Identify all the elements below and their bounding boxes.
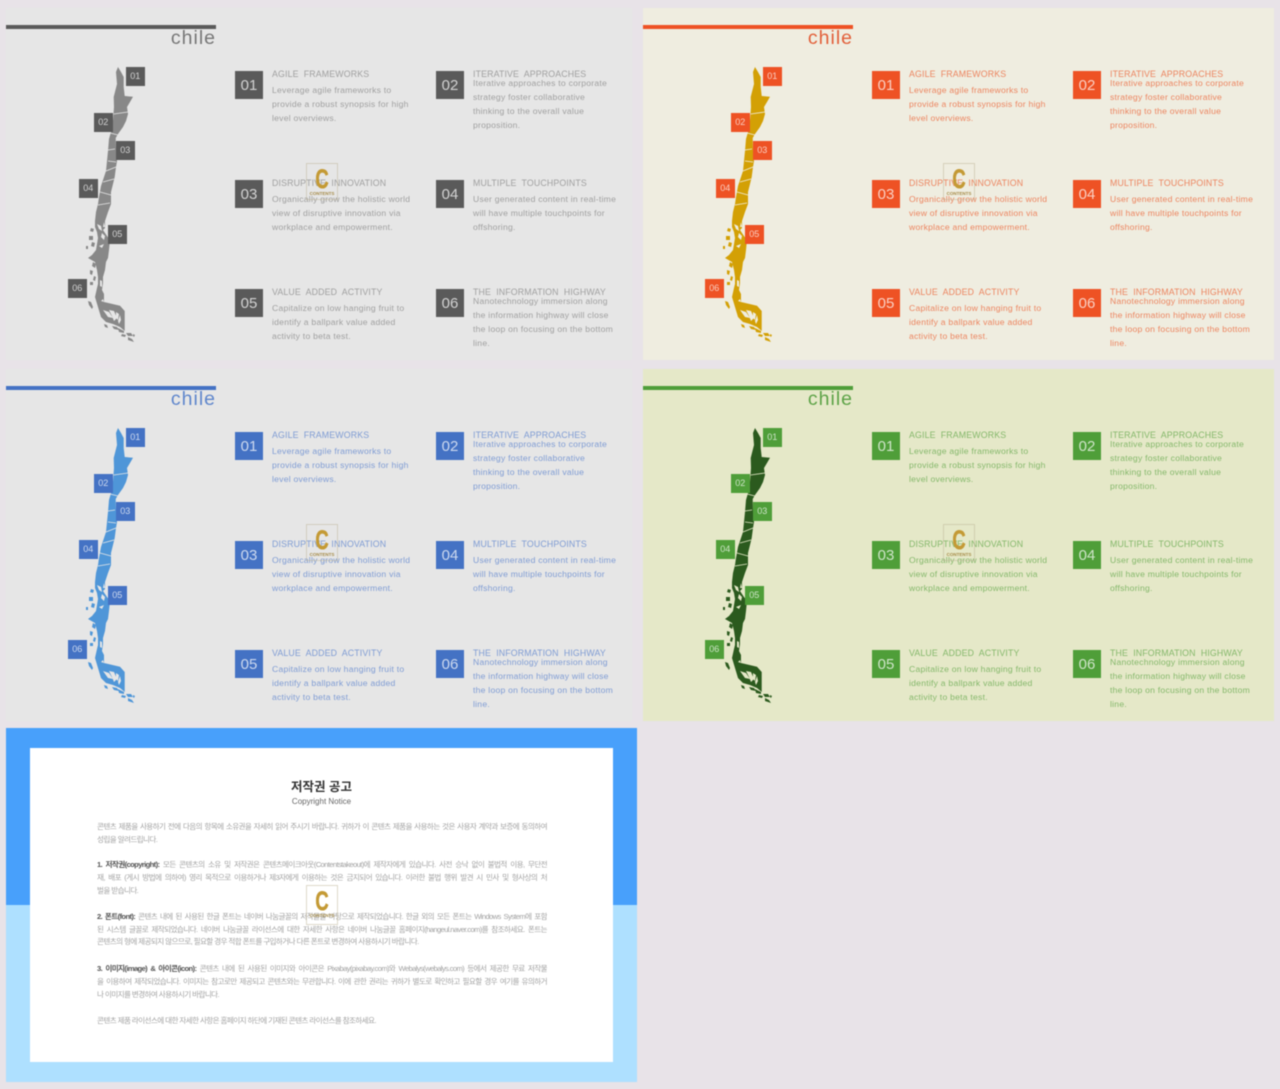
item 06: the information highway will close (1110, 310, 1246, 320)
item 02: thinking to the overall value (1110, 106, 1221, 116)
item 04: will have multiple touchpoints for (473, 208, 605, 218)
item 05 (234, 286, 404, 341)
heading: chile: chile (171, 388, 216, 410)
item 01: level overviews. (272, 474, 336, 484)
watermark logo (943, 524, 975, 561)
item 02: ITERATIVE APPROACHES (473, 68, 586, 78)
item 01 (234, 430, 409, 484)
item 02: proposition. (473, 120, 520, 130)
item 05: identify a ballpark value added (909, 678, 1033, 688)
item 06: THE INFORMATION HIGHWAY (1110, 648, 1243, 658)
item 01 (871, 68, 1046, 122)
map marker 05: 05 (112, 229, 122, 239)
map marker 05: 05 (112, 590, 122, 600)
item 02: 02 (442, 77, 458, 94)
panel: red and gold chile slide (643, 8, 1274, 360)
item 02: Iterative approaches to corporate (473, 78, 607, 88)
item 01 (871, 430, 1046, 484)
item 06: the loop on focusing on the bottom (1110, 324, 1250, 334)
item 03: Organically grow the holistic world (272, 194, 410, 204)
map marker 06 (68, 279, 86, 298)
map marker 03 (116, 141, 134, 160)
item 06: Nanotechnology immersion along (473, 657, 608, 667)
item 05: Capitalize on low hanging fruit to (909, 664, 1041, 674)
item 01: Leverage agile frameworks to (909, 84, 1028, 94)
item 04: User generated content in real-time (473, 554, 616, 564)
item 01: 01 (241, 77, 257, 94)
paragraph 3: image and icon (96, 964, 548, 999)
watermark logo: CONTENTS (947, 191, 971, 196)
item 06: Nanotechnology immersion along (473, 296, 608, 306)
item 01: 01 (878, 438, 894, 455)
item 03: workplace and empowerment. (272, 582, 393, 592)
watermark logo (306, 524, 338, 561)
map of Chile: grey (86, 67, 136, 342)
item 04 (1072, 538, 1253, 593)
item 03: 03 (241, 547, 257, 564)
heading: chile: chile (808, 388, 853, 410)
paragraph 2: font (96, 912, 548, 946)
item 02 (1072, 430, 1244, 491)
item 02: strategy foster collaborative (1110, 453, 1222, 463)
item 03: 03 (241, 186, 257, 203)
item 02: 02 (1079, 77, 1095, 94)
map marker 02: 02 (98, 478, 108, 488)
item 04: 04 (442, 547, 458, 564)
item 01: Leverage agile frameworks to (272, 446, 391, 456)
item 06: line. (473, 699, 490, 709)
paragraph 3: image and icon: 을 이용하여 제작되었습니다. 이미지는 참고로만 제공되고 콘텐츠와는 무관합니다. 이에 관한 권리는 귀하가 별도로 확인하고 필요할 경우 여기를 유의하거 (97, 977, 547, 986)
item 04: MULTIPLE TOUCHPOINTS (1110, 178, 1224, 188)
map marker 03 (753, 141, 772, 160)
map marker 01 (126, 428, 144, 446)
panel: green chile slide (643, 369, 1274, 721)
item 06: line. (473, 338, 490, 348)
item 03 (234, 538, 410, 593)
item 03: view of disruptive innovation via (909, 208, 1038, 218)
map marker 02: 02 (735, 478, 745, 488)
item 01: level overviews. (909, 474, 974, 484)
paragraph 3: image and icon: 3. 이미지(image) & 아이콘(icon): 콘텐츠 내에 된 사용된 이미지와 아이콘은 Pixabay(pixabay.com)와 Webalys(webalys.com) 등에서 제공한 무료 저작물 (97, 964, 547, 973)
item 04: offshoring. (473, 222, 516, 232)
map marker 03: 03 (120, 506, 130, 516)
item 06: 06 (442, 656, 458, 673)
item 03: Organically grow the holistic world (909, 554, 1047, 564)
item 03 (234, 178, 410, 232)
item 06: the information highway will close (473, 671, 609, 681)
item 05: activity to beta test. (909, 692, 988, 702)
item 02: thinking to the overall value (473, 467, 584, 477)
map marker 02 (731, 113, 750, 132)
map marker 06: 06 (709, 283, 719, 293)
item 02: thinking to the overall value (1110, 467, 1221, 477)
item 03: Organically grow the holistic world (272, 554, 410, 564)
notice card (30, 748, 613, 1062)
item 03: DISRUPTIVE INNOVATION (909, 538, 1023, 548)
item 02: proposition. (1110, 120, 1157, 130)
item 05: 05 (241, 656, 257, 673)
paragraph 1: copyright: 벌을 받습니다. (97, 886, 138, 895)
item 04 (435, 538, 616, 593)
item 04: User generated content in real-time (473, 194, 616, 204)
item 02 (1072, 68, 1244, 130)
item 06: 06 (442, 295, 458, 312)
map marker 01: 01 (767, 71, 777, 81)
map marker 03 (753, 502, 772, 520)
map marker 03: 03 (757, 506, 767, 516)
item 02: ITERATIVE APPROACHES (473, 430, 586, 440)
heading bar: grey (6, 25, 216, 28)
watermark logo (943, 163, 975, 200)
map marker 05: 05 (749, 229, 759, 239)
map marker 02 (94, 474, 112, 492)
heading bar: blue (6, 386, 216, 390)
map marker 06 (68, 640, 86, 658)
map marker 02 (94, 113, 112, 132)
item 05: activity to beta test. (272, 692, 351, 702)
item 05 (234, 648, 404, 702)
item 04: will have multiple touchpoints for (473, 568, 605, 578)
item 03: DISRUPTIVE INNOVATION (272, 538, 386, 548)
item 05: Capitalize on low hanging fruit to (272, 664, 404, 674)
item 06: the loop on focusing on the bottom (473, 324, 613, 334)
item 04: 04 (442, 186, 458, 203)
map marker 06 (705, 640, 724, 658)
map marker 01: 01 (130, 71, 140, 81)
item 02: strategy foster collaborative (1110, 92, 1222, 102)
item 02 (435, 430, 607, 491)
watermark logo: C (315, 886, 329, 916)
map marker 01: 01 (767, 432, 777, 442)
item 01: provide a robust synopsis for high (272, 460, 409, 470)
item 04: MULTIPLE TOUCHPOINTS (473, 178, 587, 188)
item 04: 04 (1079, 186, 1095, 203)
item 04: User generated content in real-time (1110, 554, 1253, 564)
item 01 (234, 68, 409, 122)
item 06: the loop on focusing on the bottom (473, 685, 613, 695)
map marker 06: 06 (72, 283, 82, 293)
map marker 05 (108, 586, 126, 604)
item 04: will have multiple touchpoints for (1110, 208, 1242, 218)
item 01: provide a robust synopsis for high (272, 98, 409, 108)
map marker 04 (79, 540, 98, 558)
item 05: identify a ballpark value added (272, 316, 396, 326)
item 04: offshoring. (1110, 222, 1153, 232)
item 05: identify a ballpark value added (909, 316, 1033, 326)
panel: blue chile slide (6, 369, 632, 721)
watermark logo: C (952, 525, 966, 555)
map marker 04: 04 (83, 544, 93, 554)
item 06: the loop on focusing on the bottom (1110, 685, 1250, 695)
map marker 01: 01 (130, 432, 140, 442)
map marker 04 (79, 179, 98, 198)
map marker 04: 04 (83, 183, 93, 193)
item 01: level overviews. (909, 112, 974, 122)
paragraph 1: copyright: 1. 저작권(copyright): 모든 콘텐츠의 소유 및 저작권은 콘텐츠메이크아웃(Contentstakeout)에 제작자에게 있습니다. 사전 승낙 없이 불법적 이용, 무단전 (97, 860, 547, 869)
item 04 (1072, 178, 1253, 232)
watermark logo: C (315, 525, 329, 555)
item 06: line. (1110, 699, 1127, 709)
item 02: Iterative approaches to corporate (1110, 78, 1244, 88)
item 01: level overviews. (272, 112, 336, 122)
item 04: will have multiple touchpoints for (1110, 568, 1242, 578)
item 02: thinking to the overall value (473, 106, 584, 116)
watermark logo: CONTENTS (947, 552, 971, 557)
map of Chile: dark green (722, 428, 772, 704)
item 03: 03 (878, 547, 894, 564)
paragraph 2: font: 된 시스템 글꼴로 제작되었습니다. 네이버 나눔글꼴 라이선스에 대한 자세한 사항은 네이버 나눔글꼴 홈페이지(hangeul.naver.com)를 참조하세요. 폰트는 (97, 925, 547, 934)
item 03: view of disruptive innovation via (909, 568, 1038, 578)
item 06 (1072, 286, 1250, 348)
item 06 (435, 648, 613, 709)
item 01: provide a robust synopsis for high (909, 98, 1046, 108)
heading bar: red (643, 25, 853, 28)
map marker 03: 03 (757, 145, 767, 155)
item 03: view of disruptive innovation via (272, 208, 401, 218)
item 02: ITERATIVE APPROACHES (1110, 430, 1223, 440)
item 01: 01 (241, 438, 257, 455)
item 06: THE INFORMATION HIGHWAY (1110, 286, 1243, 296)
item 04: User generated content in real-time (1110, 194, 1253, 204)
item 04: offshoring. (473, 582, 516, 592)
map marker 04 (716, 540, 734, 558)
item 02: strategy foster collaborative (473, 453, 585, 463)
watermark logo (306, 885, 338, 925)
item 02 (435, 68, 607, 130)
item 03: workplace and empowerment. (272, 222, 393, 232)
item 01: Leverage agile frameworks to (272, 84, 391, 94)
item 01: 01 (878, 77, 894, 94)
paragraph 3: image and icon: 나 이미지를 변경하여 사용하시기 바랍니다. (97, 990, 219, 999)
map marker 04: 04 (720, 183, 730, 193)
item 02: ITERATIVE APPROACHES (1110, 68, 1223, 78)
item 02: proposition. (473, 481, 520, 491)
item 01: Leverage agile frameworks to (909, 446, 1028, 456)
map marker 05 (745, 225, 764, 244)
item 05: 05 (878, 295, 894, 312)
item 02: Iterative approaches to corporate (473, 439, 607, 449)
item 03: workplace and empowerment. (909, 222, 1030, 232)
item 02: 02 (442, 438, 458, 455)
item 06: 06 (1079, 295, 1095, 312)
item 06: line. (1110, 338, 1127, 348)
watermark logo: C (952, 164, 966, 194)
item 01: AGILE FRAMEWORKS (272, 68, 369, 78)
item 02: strategy foster collaborative (473, 92, 585, 102)
item 05: VALUE ADDED ACTIVITY (272, 648, 382, 658)
item 03: 03 (878, 186, 894, 203)
map marker 03: 03 (120, 145, 130, 155)
item 02: Iterative approaches to corporate (1110, 439, 1244, 449)
panel: grey chile slide (6, 8, 632, 360)
map marker 02 (731, 474, 750, 492)
item 05: VALUE ADDED ACTIVITY (909, 286, 1020, 296)
item 05: Capitalize on low hanging fruit to (272, 302, 404, 312)
item 05: activity to beta test. (909, 330, 988, 340)
paragraph 2: font: 2. 폰트(font): 콘텐츠 내에 된 사용된 한글 폰트는 네이버 나눔글꼴의 저작물을 바탕으로 제작되었습니다. 한글 외의 모든 폰트는 Windows System에 포함 (97, 912, 547, 921)
item 05: activity to beta test. (272, 330, 351, 340)
item 05: Capitalize on low hanging fruit to (909, 302, 1041, 312)
item 04: MULTIPLE TOUCHPOINTS (473, 538, 587, 548)
watermark logo: C (315, 164, 329, 194)
item 05: 05 (241, 295, 257, 312)
notice title: 저작권 공고 (291, 780, 352, 794)
map marker 06: 06 (72, 644, 82, 654)
paragraph 1: copyright (97, 860, 548, 895)
item 02: 02 (1079, 438, 1095, 455)
item 03: DISRUPTIVE INNOVATION (272, 178, 386, 188)
paragraph 2: font: 콘텐츠의 형에 제공되지 않으므로, 필요할 경우 적합 폰트를 구입하거나 다른 폰트로 변경하여 사용하시기 바랍니다. (97, 937, 419, 946)
item 05: 05 (878, 656, 894, 673)
item 01: AGILE FRAMEWORKS (909, 430, 1006, 440)
watermark logo: CONTENTS (310, 191, 334, 196)
notice subtitle: Copyright Notice (292, 797, 351, 806)
map marker 01 (763, 428, 782, 446)
map marker 06: 06 (709, 644, 719, 654)
map marker 02: 02 (98, 117, 108, 127)
item 06 (435, 286, 613, 348)
item 03: workplace and empowerment. (909, 582, 1030, 592)
watermark logo: CONTENTS (310, 552, 334, 557)
item 06: the information highway will close (1110, 671, 1246, 681)
heading: chile: chile (808, 27, 853, 49)
watermark logo (306, 163, 338, 200)
map marker 04 (716, 179, 734, 198)
map marker 05 (745, 586, 764, 604)
item 03 (871, 538, 1047, 593)
item 01: AGILE FRAMEWORKS (909, 68, 1006, 78)
map marker 06 (705, 279, 724, 298)
heading: chile: chile (171, 27, 216, 49)
map marker 03 (116, 502, 134, 520)
item 03: DISRUPTIVE INNOVATION (909, 178, 1023, 188)
item 06: THE INFORMATION HIGHWAY (473, 648, 606, 658)
item 06: the information highway will close (473, 310, 609, 320)
map of Chile: gold (722, 66, 772, 342)
paragraph 1: copyright: 재, 배포 (게시 방법에 의하여) 영리 목적으로 이용하거나 제3자에게 이용하는 것은 금지되어 있습니다. 이러한 불법 행위 발견 시 민사 및 형사상의 처 (97, 873, 547, 882)
map marker 04: 04 (720, 544, 730, 554)
item 06 (1072, 648, 1250, 709)
map marker 01 (126, 67, 144, 86)
heading bar: green (643, 386, 853, 390)
intro paragraph: 성립을 알려드립니다. (97, 835, 157, 844)
item 01: AGILE FRAMEWORKS (272, 430, 369, 440)
item 06: 06 (1079, 656, 1095, 673)
item 05: identify a ballpark value added (272, 678, 396, 688)
item 03: Organically grow the holistic world (909, 194, 1047, 204)
item 01: provide a robust synopsis for high (909, 460, 1046, 470)
map of Chile: blue (85, 428, 136, 704)
intro paragraph: 콘텐츠 제품을 사용하기 전에 다음의 항목에 소유권을 자세히 읽어 주시기 바랍니다. 귀하가 이 콘텐츠 제품을 사용하는 것은 사용자 계약과 보증에 동의하여 (97, 822, 547, 831)
item 05: VALUE ADDED ACTIVITY (909, 648, 1020, 658)
item 03: view of disruptive innovation via (272, 568, 401, 578)
map marker 05: 05 (749, 590, 759, 600)
item 04 (435, 178, 616, 232)
item 06: THE INFORMATION HIGHWAY (473, 286, 606, 296)
item 04: 04 (1079, 547, 1095, 564)
item 06: Nanotechnology immersion along (1110, 296, 1245, 306)
intro paragraph (97, 822, 548, 844)
item 06: Nanotechnology immersion along (1110, 657, 1245, 667)
panel: copyright notice (6, 728, 637, 1082)
item 04: offshoring. (1110, 582, 1153, 592)
item 05: VALUE ADDED ACTIVITY (272, 286, 382, 296)
item 05 (871, 286, 1042, 341)
item 05 (871, 648, 1042, 702)
item 02: proposition. (1110, 481, 1157, 491)
item 03 (871, 178, 1048, 232)
closing paragraph: 콘텐츠 제품 라이선스에 대한 자세한 사항은 홈페이지 하단에 기재된 콘텐츠 라이선스를 참조하세요. (97, 1016, 376, 1025)
map marker 01 (763, 67, 782, 86)
watermark logo: CONTENTS (310, 913, 334, 918)
item 04: MULTIPLE TOUCHPOINTS (1110, 538, 1224, 548)
map marker 05 (108, 225, 126, 244)
map marker 02: 02 (735, 117, 745, 127)
